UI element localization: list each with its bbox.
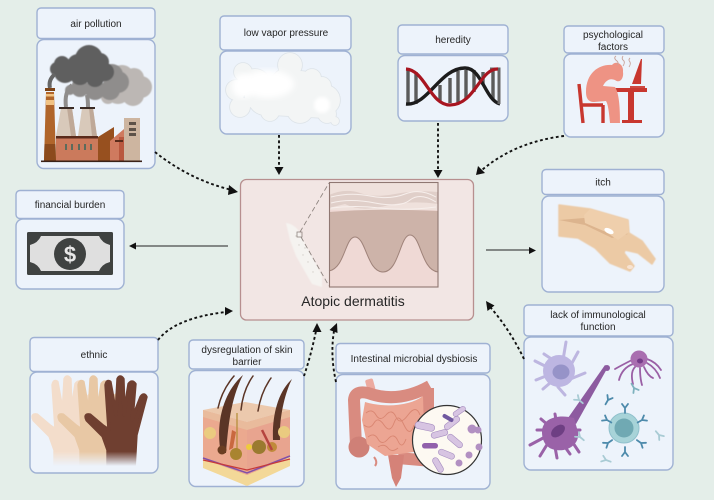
icon: banknote: $ — [64, 242, 76, 267]
icon: hands of different skin tones — [33, 377, 146, 470]
arrow: dysregulation of skin barrier to atopic dermatitis — [304, 323, 322, 376]
heading: low vapor pressure: low vapor pressure — [244, 28, 329, 39]
icon: factory with smoke — [41, 45, 152, 162]
heading: ethnic: ethnic — [81, 350, 107, 361]
arrow: immunological function to atopic dermatitis — [486, 301, 524, 359]
heading: dysregulation of skin barrier — [189, 340, 304, 369]
heading: lack of immunological function: lack of immunological — [550, 310, 646, 321]
arrow: ethnic to atopic dermatitis — [158, 307, 233, 340]
heading: psychological factors: psychological — [583, 30, 643, 41]
arrow: heredity to atopic dermatitis — [434, 123, 442, 178]
icon: skin cross-section — [203, 375, 292, 486]
panel: psychological factors — [564, 26, 664, 137]
icon: intestines with bacteria — [348, 378, 482, 487]
heading: intestinal microbial dysbiosis — [336, 344, 490, 373]
heading: dysregulation of skin barrier: dysregulation of skin — [201, 345, 293, 356]
arrow: intestinal dysbiosis to atopic dermatitis — [330, 323, 338, 382]
heading: intestinal microbial dysbiosis: Intestinal microbial dysbiosis — [351, 354, 477, 365]
panel body: financial burden — [16, 219, 124, 289]
heading: itch: itch — [595, 178, 611, 188]
heading: air pollution: air pollution — [70, 19, 122, 30]
heading: psychological factors — [564, 26, 664, 53]
heading: lack of immunological function — [524, 305, 673, 336]
arrow: psychological factors to atopic dermatitis — [476, 136, 564, 175]
panel body: low vapor pressure — [220, 51, 351, 134]
arrow: atopic dermatitis to financial burden — [129, 242, 228, 250]
panel body: itch — [542, 196, 664, 292]
arrow: low vapor pressure to atopic dermatitis — [274, 135, 284, 175]
panel body: heredity — [398, 56, 508, 121]
illustration: skin cross-section inset — [329, 182, 438, 287]
panel body: lack of immunological function — [524, 337, 673, 470]
heading: dysregulation of skin barrier: barrier — [233, 357, 262, 368]
panel body: intestinal microbial dysbiosis — [336, 374, 490, 489]
icon: scratching hand — [559, 205, 655, 271]
panel body: dysregulation of skin barrier — [189, 370, 304, 486]
panel: low vapor pressure — [220, 16, 351, 134]
heading: atopic dermatitis: Atopic dermatitis — [301, 293, 405, 309]
panel: dysregulation of skin barrier — [189, 340, 304, 486]
icon: arm with skin patch — [286, 183, 329, 287]
heading: heredity: heredity — [435, 35, 471, 46]
arrow: air pollution to atopic dermatitis — [155, 152, 238, 195]
heading: financial burden: financial burden — [35, 200, 105, 211]
panel: intestinal microbial dysbiosis — [336, 344, 490, 489]
icon: cloud — [226, 53, 340, 125]
icon: immune cells and antibodies — [530, 342, 664, 465]
panel: financial burden — [16, 190, 124, 289]
heading: psychological factors: factors — [598, 42, 628, 53]
panel: heredity — [398, 25, 508, 121]
panel body: air pollution — [37, 40, 155, 168]
panel: air pollution — [37, 8, 155, 168]
icon: stressed person at desk — [579, 56, 647, 123]
panel: ethnic — [30, 338, 158, 473]
arrow: atopic dermatitis to itch — [486, 247, 536, 254]
heading: air pollution — [37, 8, 155, 38]
panel: itch — [542, 170, 664, 292]
panel body: ethnic — [30, 372, 158, 473]
icon: DNA helix — [406, 68, 500, 105]
panel: lack of immunological function — [524, 305, 673, 470]
heading: lack of immunological function: function — [580, 322, 616, 333]
panel: atopic dermatitis — [240, 180, 474, 320]
panel body: psychological factors — [564, 54, 664, 137]
